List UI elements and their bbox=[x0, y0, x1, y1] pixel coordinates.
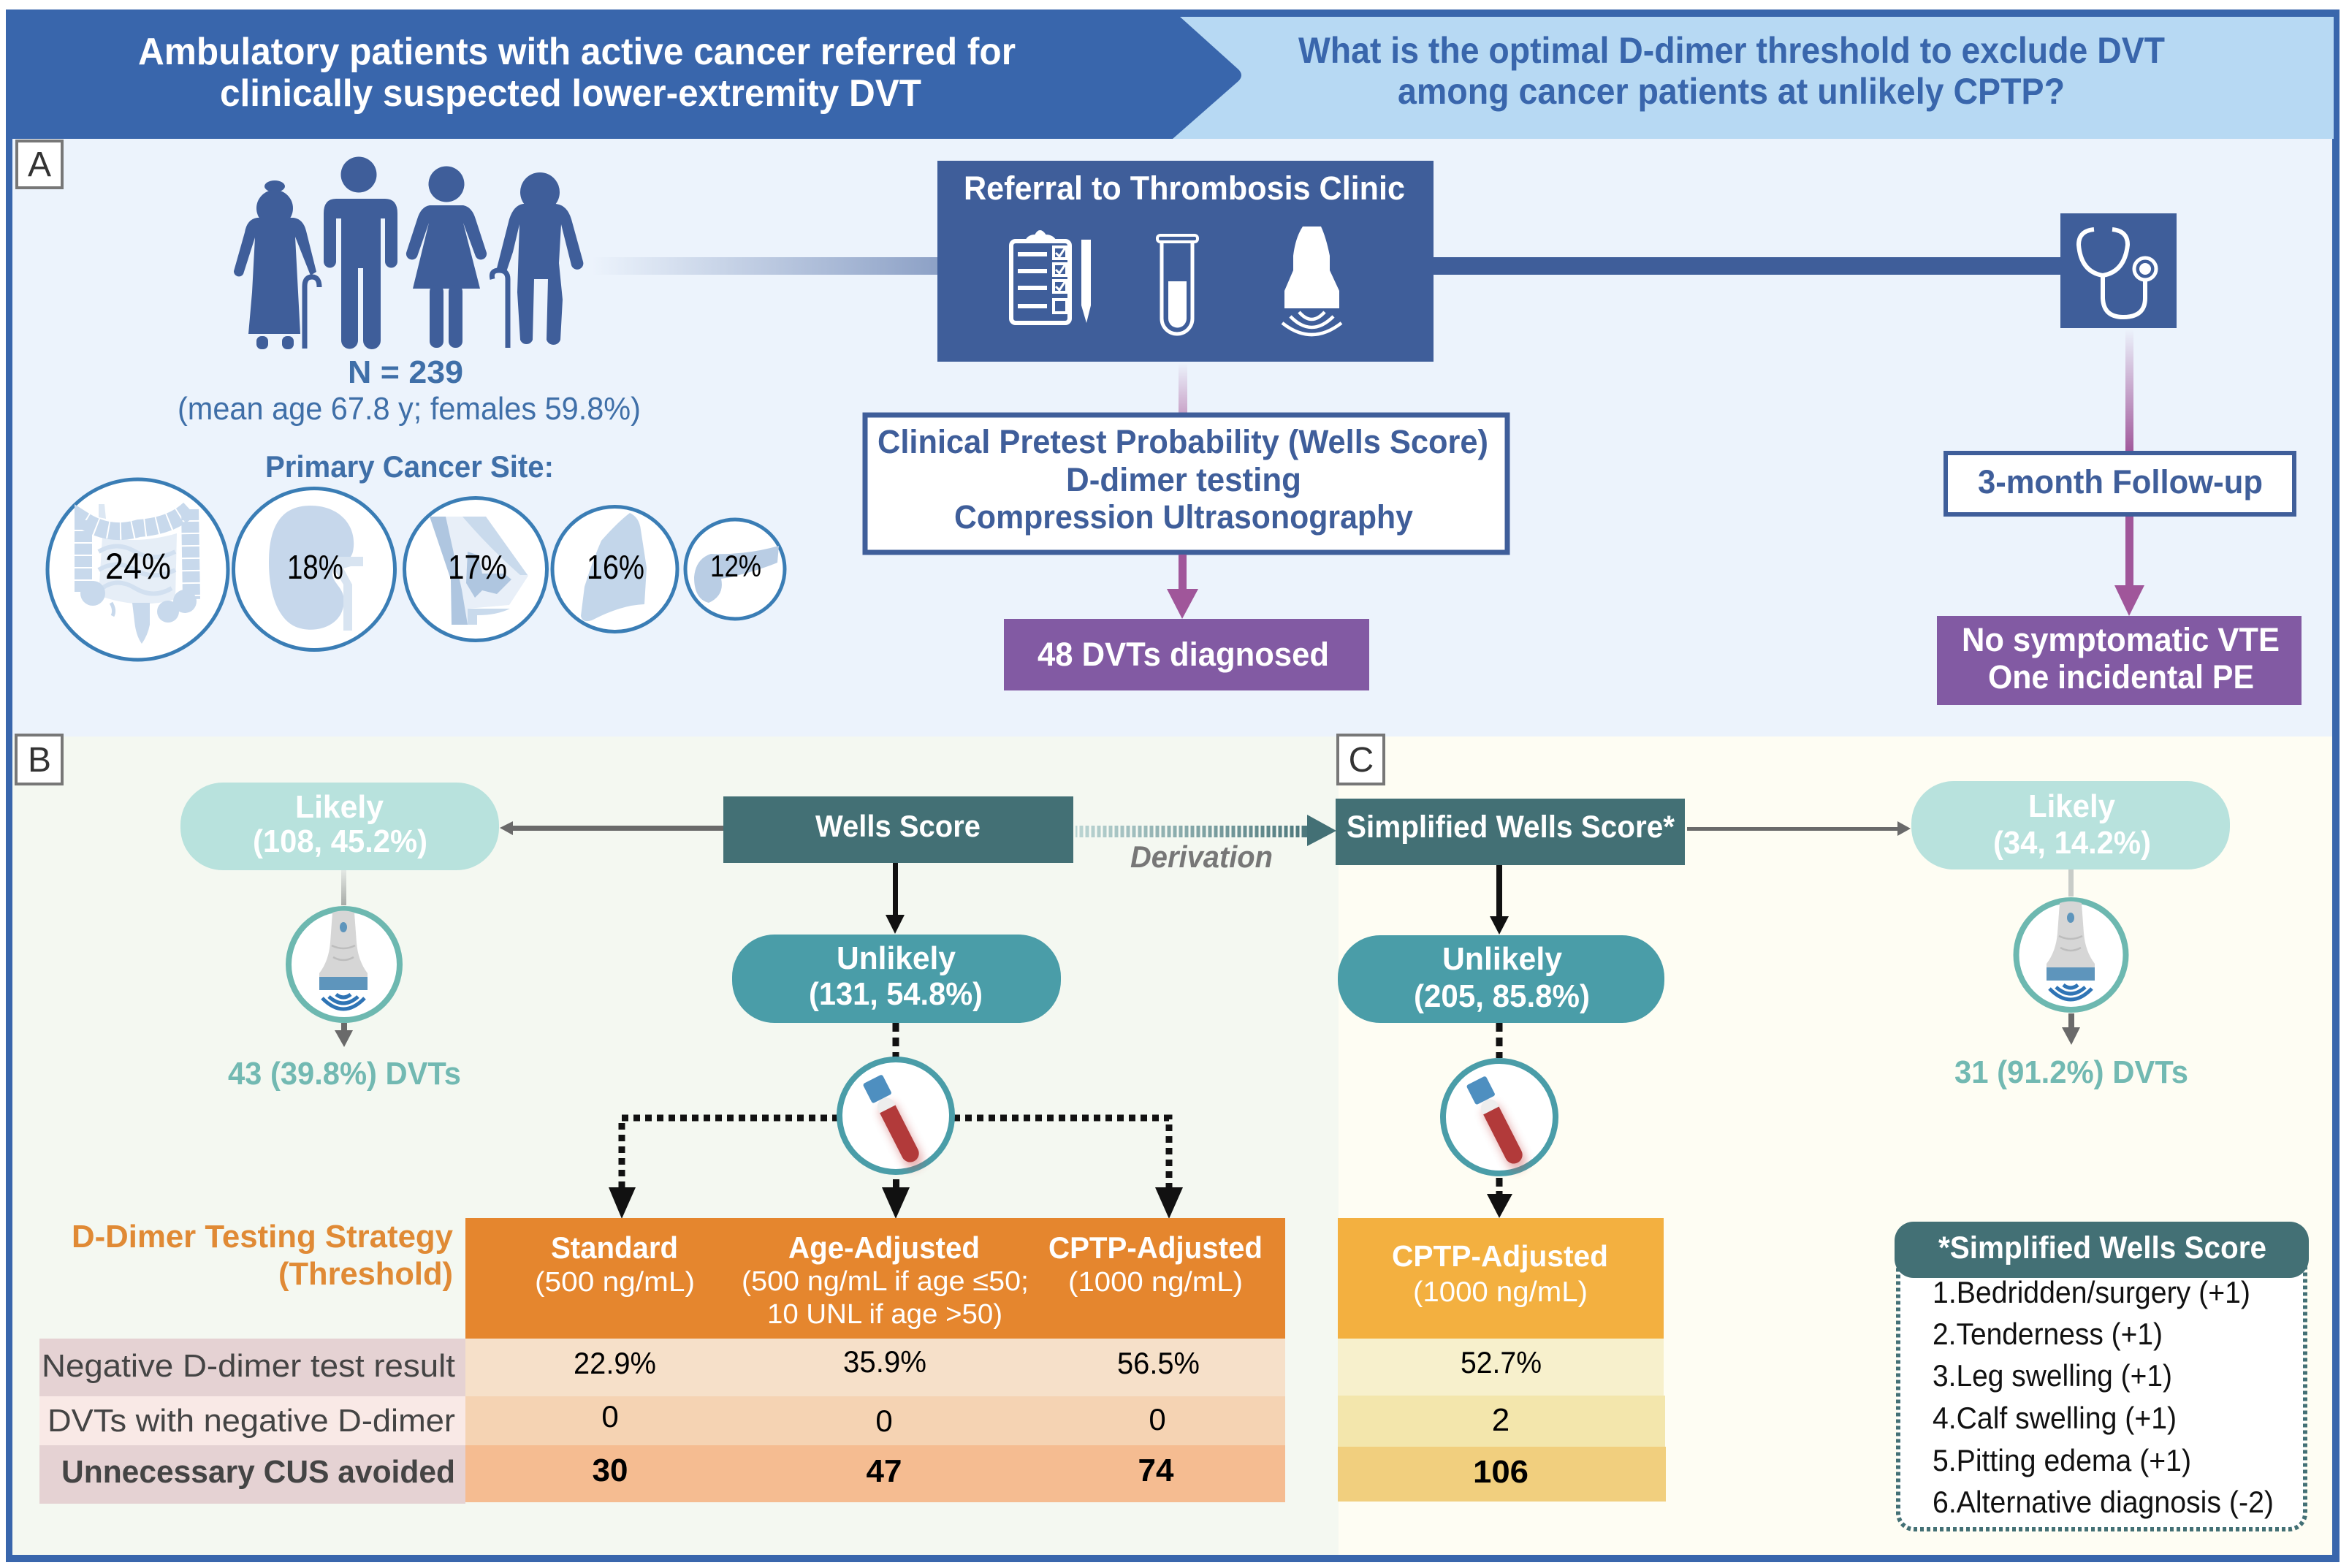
cancer site: kidney 18% bbox=[234, 488, 395, 650]
column: CPTP-adjusted bbox=[1048, 1230, 1263, 1298]
referral box bbox=[937, 161, 1434, 362]
row: DVTs with negative D-dimer bbox=[39, 1396, 1285, 1445]
column: standard bbox=[535, 1230, 695, 1298]
column: standard: Standard bbox=[551, 1230, 678, 1265]
row: negative D-dimer: 52.7% bbox=[1461, 1345, 1542, 1379]
icon: man bbox=[324, 156, 397, 349]
patient demographics: (mean age 67.8 y; females 59.8%) bbox=[178, 391, 641, 427]
simplified likely DVT result: 31 (91.2%) DVTs bbox=[1954, 1054, 2188, 1090]
arrow: testing to DVTs diagnosed bbox=[1167, 555, 1198, 619]
cancer site: lung 16%: 16% bbox=[587, 548, 644, 586]
arrow: ultrasound to DVTs bbox=[2062, 1013, 2080, 1045]
row: unnecessary CUS avoided bbox=[1338, 1447, 1666, 1502]
row: negative D-dimer: Negative D-dimer test result bbox=[42, 1348, 455, 1384]
Wells score box: Wells Score bbox=[815, 809, 981, 843]
Wells likely pill: Likely bbox=[295, 789, 384, 825]
row: unnecessary CUS avoided: 30 bbox=[593, 1453, 628, 1488]
Wells likely DVT result: 43 (39.8%) DVTs bbox=[228, 1056, 461, 1092]
row: unnecessary CUS avoided: 106 bbox=[1473, 1454, 1528, 1490]
arrow: ultrasound to DVTs bbox=[335, 1023, 353, 1047]
cancer site: breast 17% bbox=[405, 498, 547, 640]
legend items: 3.Leg swelling (+1) bbox=[1933, 1358, 2172, 1393]
row: negative D-dimer: 22.9% bbox=[574, 1346, 656, 1380]
connector: referral to testing bbox=[1179, 363, 1187, 414]
dashed connector: unlikely to D-dimer bbox=[893, 1023, 899, 1058]
derivation arrow bbox=[1075, 815, 1336, 874]
column: age-adjusted: 10 UNL if age >50) bbox=[767, 1299, 1002, 1330]
arrow: to standard bbox=[609, 1187, 636, 1219]
panel label C bbox=[1338, 735, 1384, 784]
connector: stethoscope to follow-up bbox=[2125, 329, 2133, 453]
column: CPTP-adjusted: (1000 ng/mL) bbox=[1068, 1267, 1243, 1298]
row: DVTs with negative D-dimer: 0 bbox=[875, 1404, 893, 1438]
legend: simplified Wells score bbox=[1895, 1222, 2309, 1529]
column: standard: (500 ng/mL) bbox=[535, 1267, 695, 1298]
icon: blood tube circle bbox=[1443, 1061, 1556, 1174]
header: study question background bbox=[1173, 17, 2334, 139]
simplified unlikely pill: (205, 85.8%) bbox=[1414, 978, 1590, 1014]
header: study question line 1: What is the optimal D-dimer threshold to exclude DVT bbox=[1298, 30, 2165, 71]
row: DVTs with negative D-dimer bbox=[1338, 1396, 1665, 1447]
simplified Wells box: Simplified Wells Score* bbox=[1347, 810, 1675, 845]
Wells unlikely pill bbox=[732, 935, 1061, 1023]
panel label A bbox=[17, 141, 62, 188]
outcome: no symptomatic VTE bbox=[1937, 616, 2302, 705]
row: unnecessary CUS avoided: 74 bbox=[1138, 1453, 1174, 1488]
connector: patients to referral bbox=[592, 257, 937, 275]
row: DVTs with negative D-dimer: 2 bbox=[1492, 1402, 1509, 1438]
outcome: 48 DVTs diagnosed: 48 DVTs diagnosed bbox=[1038, 636, 1329, 673]
cancer site: pancreas 12% bbox=[685, 520, 785, 619]
testing line 3: Compression Ultrasonography bbox=[954, 498, 1413, 536]
dashed branches to strategies bbox=[622, 1118, 1169, 1190]
legend items: 4.Calf swelling (+1) bbox=[1933, 1401, 2177, 1435]
simplified likely pill bbox=[1911, 781, 2230, 869]
legend items: 2.Tenderness (+1) bbox=[1933, 1317, 2163, 1351]
legend items bbox=[1933, 1275, 2274, 1519]
icon: ultrasound probe circle bbox=[2017, 900, 2126, 1010]
table header: CPTP-Adjusted bbox=[1392, 1239, 1608, 1273]
row: negative D-dimer bbox=[39, 1339, 1285, 1396]
panel label A: A bbox=[28, 145, 51, 184]
header: population arrow bbox=[6, 9, 1241, 139]
arrow: Wells to unlikely bbox=[886, 863, 905, 934]
panel label B: B bbox=[28, 741, 51, 780]
simplified Wells box bbox=[1336, 799, 1685, 865]
row: negative D-dimer: 35.9% bbox=[843, 1344, 926, 1379]
Wells unlikely pill: Unlikely bbox=[837, 940, 956, 976]
row: negative D-dimer: 56.5% bbox=[1117, 1346, 1200, 1380]
patient count: N = 239 bbox=[348, 354, 463, 390]
arrow: to age-adjusted bbox=[882, 1179, 910, 1219]
column: age-adjusted: Age-Adjusted bbox=[788, 1230, 980, 1265]
legend items: 6.Alternative diagnosis (-2) bbox=[1933, 1485, 2274, 1519]
arrow: Wells to likely bbox=[500, 821, 723, 835]
testing line 2: D-dimer testing bbox=[1066, 461, 1301, 498]
column: age-adjusted bbox=[742, 1230, 1029, 1330]
legend header: *Simplified Wells Score bbox=[1938, 1230, 2266, 1266]
simplified unlikely pill bbox=[1338, 935, 1664, 1023]
connector: likely to ultrasound bbox=[341, 870, 346, 905]
connector: likely to ultrasound bbox=[2068, 869, 2074, 897]
icon: stethoscope box bbox=[2060, 213, 2177, 328]
row: DVTs with negative D-dimer: 0 bbox=[1149, 1402, 1166, 1436]
header: study question line 2: among cancer patients at unlikely CPTP? bbox=[1398, 71, 2065, 112]
row: unnecessary CUS avoided: 47 bbox=[867, 1453, 902, 1489]
icon: older man with cane bbox=[492, 172, 583, 348]
panel B background bbox=[12, 737, 1339, 1555]
simplified likely pill: (34, 14.2%) bbox=[1993, 825, 2151, 861]
arrow: to CPTP-adjusted bbox=[1155, 1187, 1183, 1219]
arrow: follow-up to outcome bbox=[2114, 517, 2144, 616]
panel B contents bbox=[16, 735, 1285, 1504]
header: population text line 1: Ambulatory patients with active cancer referred for bbox=[138, 31, 1016, 73]
connector: referral to follow-up bbox=[1434, 257, 2060, 275]
testing box bbox=[865, 415, 1507, 552]
panel A contents bbox=[17, 141, 2302, 705]
table: simplified CPTP-adjusted strategy bbox=[1338, 1218, 1666, 1502]
row: unnecessary CUS avoided: Unnecessary CUS avoided bbox=[61, 1454, 455, 1490]
cancer site: pancreas 12%: 12% bbox=[710, 549, 761, 583]
testing line 1: Clinical Pretest Probability (Wells Score) bbox=[877, 423, 1488, 460]
header banner bbox=[6, 9, 2334, 139]
column: age-adjusted: (500 ng/mL if age ≤50; bbox=[742, 1266, 1029, 1297]
panel C background bbox=[1339, 737, 2332, 1555]
panel A background bbox=[12, 139, 2332, 737]
table heading: D-Dimer Testing Strategy bbox=[72, 1219, 454, 1255]
cancer site: kidney 18%: 18% bbox=[287, 548, 343, 586]
cancer site: colon 24% bbox=[47, 479, 228, 660]
table header row bbox=[465, 1218, 1285, 1339]
panel C contents bbox=[1336, 735, 2309, 1529]
outcome line 1: No symptomatic VTE bbox=[1962, 621, 2280, 658]
row: negative D-dimer bbox=[1338, 1339, 1664, 1396]
Wells likely pill bbox=[180, 783, 499, 870]
table header: (1000 ng/mL) bbox=[1413, 1276, 1588, 1308]
panel label B bbox=[16, 735, 62, 784]
simplified likely pill: Likely bbox=[2028, 788, 2115, 824]
icon: test tube bbox=[1157, 235, 1198, 334]
primary cancer site heading: Primary Cancer Site: bbox=[265, 449, 554, 484]
Wells unlikely pill: (131, 54.8%) bbox=[809, 976, 983, 1012]
Wells score box bbox=[723, 796, 1073, 863]
arrow: simplified to unlikely bbox=[1490, 865, 1509, 935]
header: population text line 2: clinically suspected lower-extremity DVT bbox=[220, 72, 921, 115]
arrow: simplified to likely bbox=[1687, 821, 1911, 836]
icon: ultrasound probe bbox=[1282, 227, 1341, 335]
icon: woman bbox=[406, 167, 487, 348]
row: DVTs with negative D-dimer: 0 bbox=[601, 1399, 619, 1434]
table header bbox=[1338, 1218, 1664, 1339]
cancer site: lung 16% bbox=[552, 507, 677, 631]
cancer site: colon 24%: 24% bbox=[105, 546, 171, 587]
follow-up box: 3-month Follow-up bbox=[1978, 463, 2263, 501]
Wells likely pill: (108, 45.2%) bbox=[253, 823, 427, 859]
simplified unlikely pill: Unlikely bbox=[1442, 941, 1563, 977]
referral title: Referral to Thrombosis Clinic bbox=[964, 170, 1405, 207]
derivation label: Derivation bbox=[1130, 840, 1273, 874]
row: unnecessary CUS avoided bbox=[39, 1445, 1285, 1504]
row: DVTs with negative D-dimer: DVTs with negative D-dimer bbox=[47, 1403, 455, 1439]
column: CPTP-adjusted: CPTP-Adjusted bbox=[1048, 1230, 1263, 1265]
legend items: 1.Bedridden/surgery (+1) bbox=[1933, 1275, 2250, 1309]
table heading bbox=[72, 1219, 454, 1292]
panel label C: C bbox=[1349, 741, 1374, 780]
table heading: (Threshold) bbox=[278, 1256, 453, 1292]
table: D-dimer testing strategy bbox=[39, 1218, 1285, 1504]
legend header bbox=[1895, 1222, 2309, 1278]
dashed connector: unlikely to D-dimer bbox=[1496, 1023, 1502, 1058]
icon: patient group bbox=[234, 156, 583, 349]
icon: grandmother with cane bbox=[234, 180, 319, 349]
legend items: 5.Pitting edema (+1) bbox=[1933, 1443, 2191, 1477]
outcome: 48 DVTs diagnosed bbox=[1004, 619, 1369, 690]
icon: blood tube circle bbox=[840, 1059, 952, 1173]
icon: ultrasound probe circle bbox=[289, 909, 400, 1020]
follow-up box bbox=[1946, 453, 2294, 514]
icon: clipboard checklist bbox=[1011, 231, 1091, 323]
arrow: D-dimer to CPTP-adjusted bbox=[1487, 1178, 1512, 1218]
outcome line 2: One incidental PE bbox=[1988, 658, 2254, 696]
cancer site: breast 17%: 17% bbox=[448, 548, 507, 586]
